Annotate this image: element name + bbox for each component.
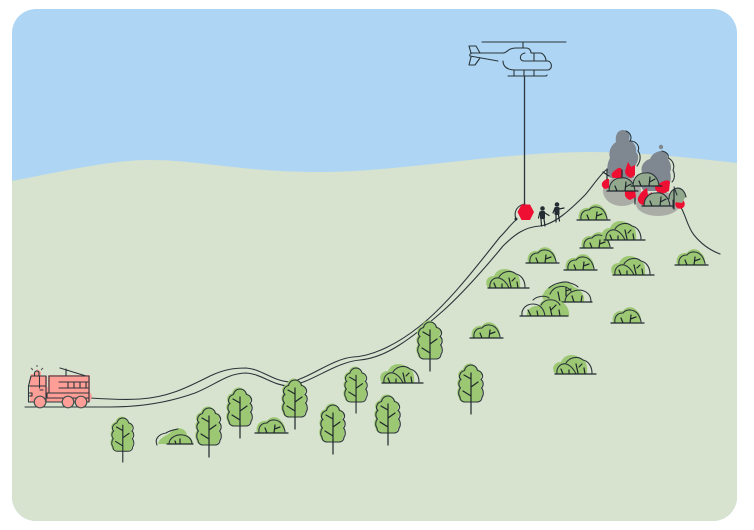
overlapping bush, front [520,296,569,316]
overlapping bush, back [542,282,592,304]
burning bushes [607,178,638,191]
flames [602,162,685,209]
burn shadows [603,176,641,206]
firefighters [538,202,564,226]
helicopter [469,42,566,76]
trees [110,320,483,462]
helicopter cable [524,76,526,206]
hillside ground [12,152,737,521]
truck outlines [28,371,46,402]
hose lines along the hill [25,170,720,407]
fire truck [28,365,92,408]
water bucket [514,204,534,220]
truck pink fill [30,369,92,402]
smoke outlines [626,131,640,166]
truck wheels [34,396,87,408]
bush with open arc, near truck [156,428,193,445]
bushes [156,204,708,445]
smoke plumes [607,130,638,178]
wildfire [602,130,686,216]
